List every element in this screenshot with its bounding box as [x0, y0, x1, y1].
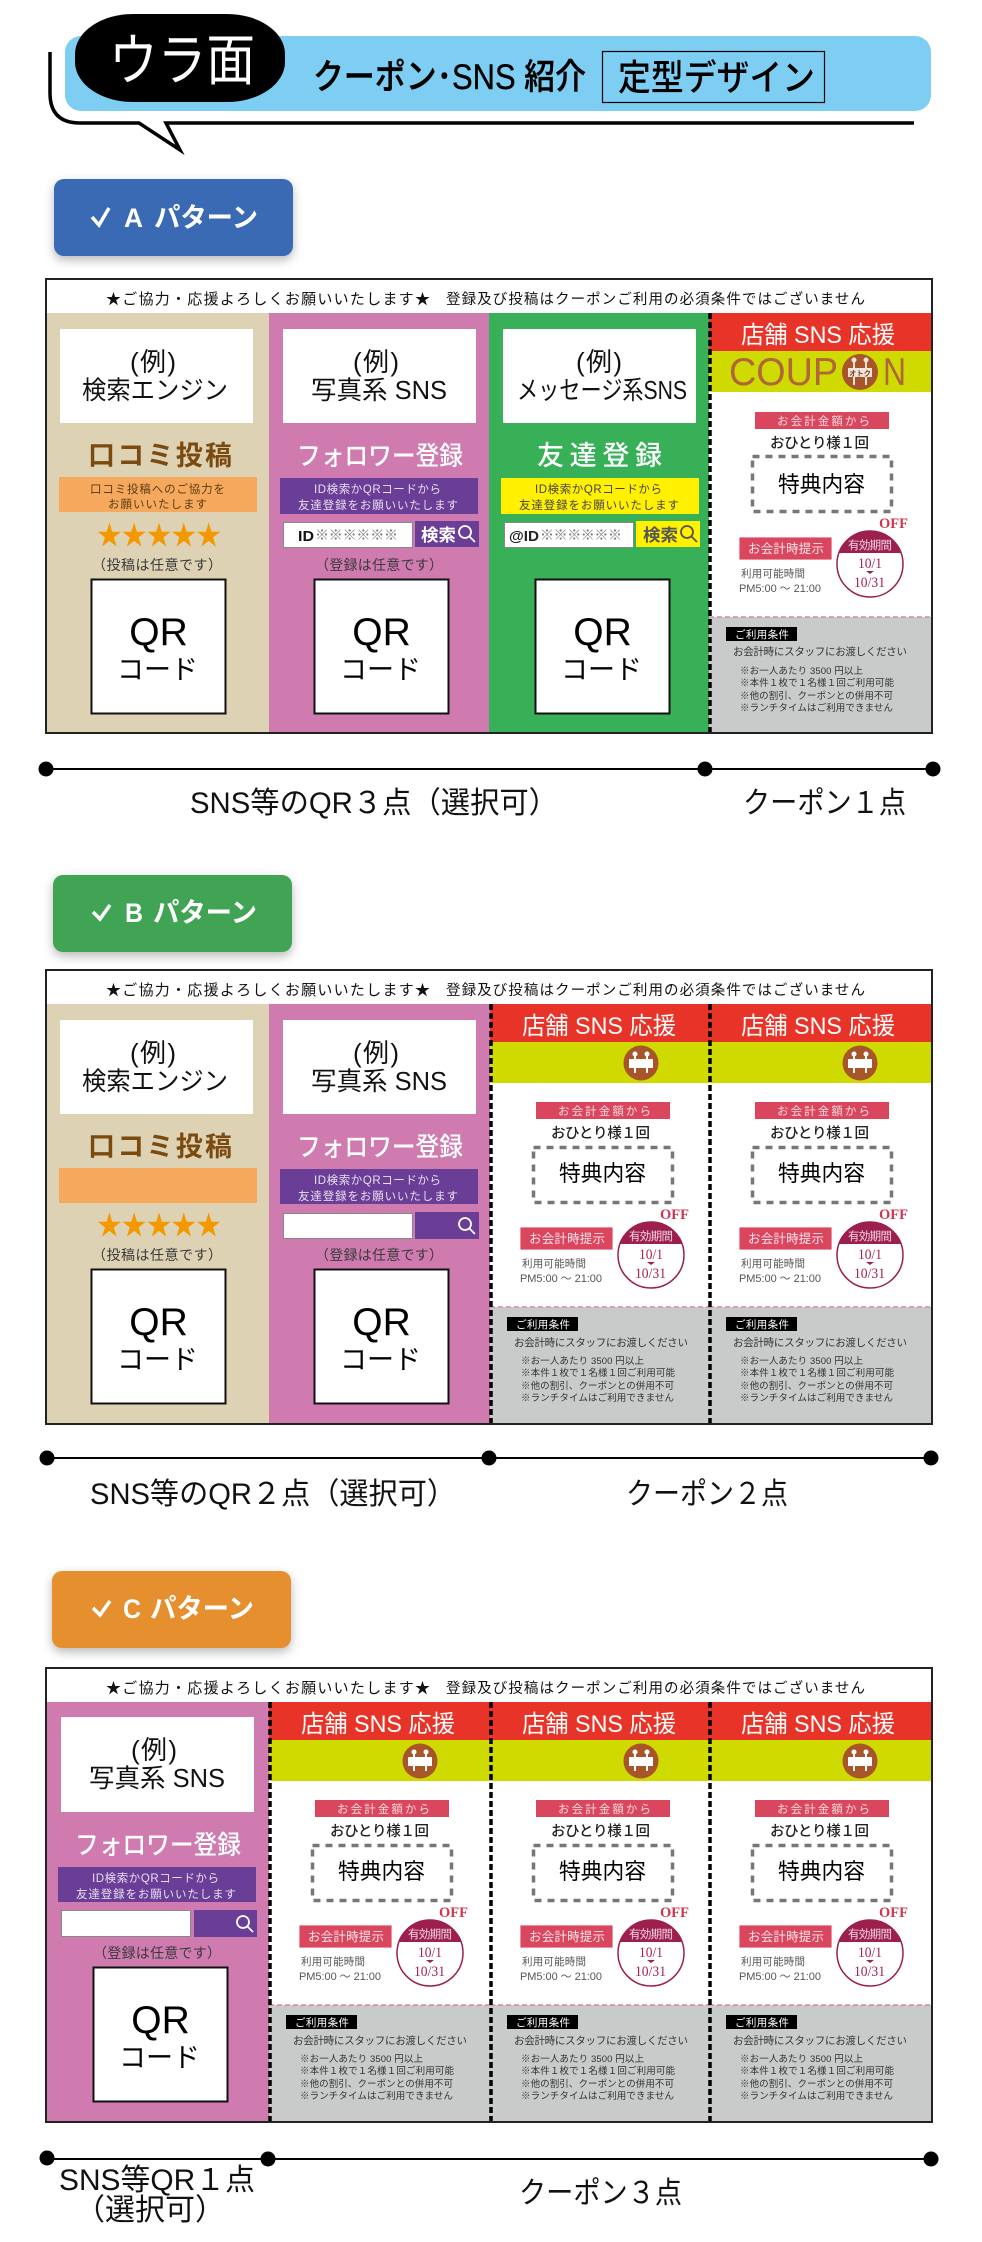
coupon C3: おひとり様１回 [770, 1823, 869, 1840]
coupon A: お会計時提示 [748, 541, 824, 556]
coupon B2: ※ランチタイムはご利用できません [740, 1392, 893, 1404]
header banner [50, 14, 931, 150]
coupon B2: ※お一人あたり 3500 円以上 [740, 1356, 863, 1367]
coupon A: 店舗 SNS 応援 [741, 322, 895, 349]
notice strip text [106, 1679, 865, 1697]
column: photo SNS follower: フォロワー登録 [297, 441, 463, 471]
coupon C2: OFF [660, 1905, 689, 1921]
column: messenger SNS friends: (例) [576, 347, 622, 377]
coupon C3: ※本件１枚で１名様１回ご利用可能 [740, 2065, 894, 2077]
pattern C button: パターン [150, 1594, 254, 1624]
column: messenger SNS friends: 検索 [643, 526, 678, 545]
coupon C2: ※ランチタイムはご利用できません [521, 2090, 674, 2102]
title text: クーポン･SNS 紹介 [313, 58, 586, 97]
column: messenger SNS friends: QR [573, 611, 632, 654]
coupon C1: OFF [439, 1905, 468, 1921]
coupon C1: ※他の割引、クーポンとの併用不可 [300, 2078, 453, 2090]
boxed label: 定型デザイン: 定型デザイン [618, 57, 815, 98]
coupon A: ※ランチタイムはご利用できません [740, 702, 893, 714]
coupon A: OFF [879, 516, 908, 532]
coupon C2 [490, 1702, 710, 2121]
column: review posting [47, 1004, 269, 1423]
column: review posting: QR [129, 611, 188, 654]
column: messenger SNS friends [489, 313, 710, 732]
coupon A [709, 313, 931, 732]
coupon B2: おひとり様１回 [770, 1125, 869, 1142]
coupon C1: 10/31 [414, 1964, 445, 1980]
coupon A: PM5:00 ～ 21:00 [739, 583, 821, 595]
column: photo SNS follower: QR [352, 611, 411, 654]
coupon B1: PM5:00 ～ 21:00 [520, 1273, 602, 1285]
coupon C1: ※本件１枚で１名様１回ご利用可能 [300, 2065, 454, 2077]
span bracket B: SNS等のQR２点（選択可） [90, 1478, 456, 1511]
coupon A: ※他の割引、クーポンとの併用不可 [740, 690, 893, 702]
coupon C1: ※お一人あたり 3500 円以上 [300, 2054, 423, 2065]
coupon C3: OFF [879, 1905, 908, 1921]
coupon C3: お会計金額から [777, 1802, 870, 1816]
column: review posting: (例) [130, 347, 176, 377]
coupon B2: ※本件１枚で１名様１回ご利用可能 [740, 1367, 894, 1379]
coupon C2: ※他の割引、クーポンとの併用不可 [521, 2078, 674, 2090]
column: messenger SNS friends: コード [561, 655, 642, 685]
coupon B1: お会計時にスタッフにお渡しください [514, 1336, 688, 1349]
column: photo SNS follower [269, 1004, 491, 1423]
column: photo SNS follower: コード [340, 1345, 421, 1375]
coupon C2: ※お一人あたり 3500 円以上 [521, 2054, 644, 2065]
coupon B1: 店舗 SNS 応援 [522, 1013, 676, 1040]
coupon B1: 10/1 [639, 1247, 663, 1263]
coupon B2: 10/31 [854, 1266, 885, 1282]
column: review posting: ★★★★★ [97, 521, 221, 551]
coupon A: 利用可能時間 [741, 567, 805, 580]
perforation line [708, 313, 712, 736]
coupon C1: 利用可能時間 [301, 1955, 365, 1968]
coupon C1: ※ランチタイムはご利用できません [300, 2090, 453, 2102]
column: photo SNS follower [47, 1702, 270, 2121]
column: photo SNS follower: コード [119, 2043, 200, 2073]
column: review posting: （投稿は任意です） [92, 557, 222, 573]
notice strip text: 登録及び投稿はクーポンご利用の必須条件ではございません [446, 290, 865, 308]
coupon C3: 10/1 [858, 1945, 882, 1961]
coupon C3: 特典内容 [778, 1859, 865, 1884]
coupon C1: 10/1 [418, 1945, 442, 1961]
coupon C2: 特典内容 [559, 1859, 646, 1884]
column: photo SNS follower: ID検索かQRコードから [314, 482, 441, 496]
coupon C3: 利用可能時間 [741, 1955, 805, 1968]
coupon C2: お会計時提示 [529, 1929, 605, 1944]
coupon B1: 有効期間 [629, 1229, 673, 1243]
notice strip text: ★ご協力・応援よろしくお願いいたします★ [106, 982, 430, 999]
coupon B2: お会計金額から [777, 1104, 870, 1118]
column: photo SNS follower: ID検索かQRコードから [314, 1173, 441, 1187]
column: photo SNS follower [269, 313, 490, 732]
notice strip text: ★ご協力・応援よろしくお願いいたします★ [106, 291, 430, 308]
coupon C3: ※お一人あたり 3500 円以上 [740, 2054, 863, 2065]
coupon A: お会計金額から [777, 414, 870, 428]
coupon C2: おひとり様１回 [551, 1823, 650, 1840]
panel: pattern C layout [46, 1668, 932, 2125]
coupon C2: お会計時にスタッフにお渡しください [514, 2034, 688, 2047]
pattern A button: パターン [154, 203, 258, 233]
coupon B1: お会計時提示 [529, 1231, 605, 1246]
coupon A: ※お一人あたり 3500 円以上 [740, 666, 863, 677]
coupon B2: PM5:00 ～ 21:00 [739, 1273, 821, 1285]
column: review posting: QR [129, 1301, 188, 1344]
coupon B1: 特典内容 [559, 1161, 646, 1186]
column: photo SNS follower: （登録は任意です） [315, 557, 443, 573]
coupon B2: お会計時提示 [748, 1231, 824, 1246]
column: review posting: 口コミ投稿 [88, 1132, 232, 1162]
column: photo SNS follower: コード [340, 655, 421, 685]
coupon B2: 店舗 SNS 応援 [741, 1013, 895, 1040]
pattern A button [54, 179, 293, 256]
coupon C3: ※他の割引、クーポンとの併用不可 [740, 2078, 893, 2090]
coupon B1 [490, 1004, 710, 1423]
column: photo SNS follower: 友達登録をお願いいたします [76, 1887, 236, 1901]
column: photo SNS follower: 友達登録をお願いいたします [298, 1189, 458, 1203]
coupon B1: 10/31 [635, 1266, 666, 1282]
coupon C2: 有効期間 [629, 1927, 673, 1941]
coupon C3: ※ランチタイムはご利用できません [740, 2090, 893, 2102]
coupon C2: 10/31 [635, 1964, 666, 1980]
column: review posting: （投稿は任意です） [92, 1247, 222, 1263]
column: messenger SNS friends: @ID [509, 528, 539, 545]
coupon B1: ご利用条件 [516, 1318, 570, 1331]
coupon C3: 10/31 [854, 1964, 885, 1980]
span bracket A: SNS QR: クーポン１点 [743, 787, 906, 820]
column: photo SNS follower: 検索 [421, 526, 456, 545]
coupon B1: ※他の割引、クーポンとの併用不可 [521, 1380, 674, 1392]
light blue title bar [65, 36, 931, 111]
column: review posting: 口コミ投稿 [88, 441, 232, 471]
coupon C2: ※本件１枚で１名様１回ご利用可能 [521, 2065, 675, 2077]
coupon A: 特典内容 [778, 472, 865, 497]
column: photo SNS follower: 友達登録をお願いいたします [298, 498, 458, 512]
coupon C3: お会計時にスタッフにお渡しください [733, 2034, 907, 2047]
black badge: ウラ面: ウラ面 [109, 29, 255, 92]
coupon C2: ご利用条件 [516, 2016, 570, 2029]
column: review posting: コード [117, 655, 198, 685]
coupon C2: 店舗 SNS 応援 [522, 1711, 676, 1738]
pattern B button: B [125, 898, 143, 928]
coupon C3: 有効期間 [848, 1927, 892, 1941]
column: review posting [47, 313, 269, 732]
coupon C1: お会計時提示 [308, 1929, 384, 1944]
column: messenger SNS friends: メッセージ系SNS [517, 377, 687, 405]
coupon C3: お会計時提示 [748, 1929, 824, 1944]
coupon C3 [709, 1702, 931, 2121]
column: review posting: コード [117, 1345, 198, 1375]
coupon B2 [709, 1004, 931, 1423]
column: messenger SNS friends: ※※※※※※ [540, 527, 622, 543]
pattern B button [53, 875, 292, 952]
coupon B1: お会計金額から [558, 1104, 651, 1118]
coupon C1: 店舗 SNS 応援 [301, 1711, 455, 1738]
coupon A: 10/31 [854, 575, 885, 591]
column: photo SNS follower: ID検索かQRコードから [92, 1871, 219, 1885]
coupon B2: ※他の割引、クーポンとの併用不可 [740, 1380, 893, 1392]
coupon A: おひとり様１回 [770, 435, 869, 452]
coupon B1: ※本件１枚で１名様１回ご利用可能 [521, 1367, 675, 1379]
pattern A button: A [124, 203, 143, 233]
column: review posting: 検索エンジン [82, 377, 228, 405]
span bracket B: クーポン２点 [626, 1478, 788, 1511]
coupon B2: 利用可能時間 [741, 1257, 805, 1270]
column: photo SNS follower: (例) [353, 347, 399, 377]
coupon C2: 10/1 [639, 1945, 663, 1961]
coupon B1: ※お一人あたり 3500 円以上 [521, 1356, 644, 1367]
coupon C1: お会計金額から [337, 1802, 430, 1816]
coupon B2: 有効期間 [848, 1229, 892, 1243]
speech bubble outline [50, 52, 914, 150]
coupon C3: PM5:00 ～ 21:00 [739, 1971, 821, 1983]
coupon B2: お会計時にスタッフにお渡しください [733, 1336, 907, 1349]
column: review posting: ★★★★★ [97, 1211, 221, 1241]
column: photo SNS follower: QR [131, 1999, 190, 2042]
coupon A: ご利用条件 [735, 628, 789, 641]
column: review posting: (例) [130, 1038, 176, 1068]
pattern C button: C [123, 1594, 141, 1624]
column: messenger SNS friends: ID検索かQRコードから [535, 482, 662, 496]
column: photo SNS follower: QR [352, 1301, 411, 1344]
coupon C3: ご利用条件 [735, 2016, 789, 2029]
column: photo SNS follower: 写真系 SNS [311, 377, 447, 405]
coupon B2: OFF [879, 1207, 908, 1223]
span bracket A: SNS QR: SNS等のQR３点（選択可） [190, 787, 558, 820]
notice strip text: 登録及び投稿はクーポンご利用の必須条件ではございません [446, 1679, 865, 1697]
perforation lines [491, 1004, 710, 1427]
column: photo SNS follower: 写真系 SNS [311, 1068, 447, 1096]
column: photo SNS follower: 写真系 SNS [89, 1765, 225, 1793]
span bracket B [40, 1450, 938, 1511]
column: messenger SNS friends: 友達登録をお願いいたします [519, 498, 679, 512]
column: photo SNS follower: （登録は任意です） [315, 1247, 443, 1263]
notice strip text: 登録及び投稿はクーポンご利用の必須条件ではございません [446, 981, 865, 999]
column: photo SNS follower: （登録は任意です） [93, 1945, 221, 1961]
coupon A: COUP [729, 351, 838, 394]
panel: pattern A layout [46, 279, 932, 736]
coupon B2: 特典内容 [778, 1161, 865, 1186]
coupon C1: PM5:00 ～ 21:00 [299, 1971, 381, 1983]
coupon B1: OFF [660, 1207, 689, 1223]
coupon B2: 10/1 [858, 1247, 882, 1263]
column: photo SNS follower: (例) [353, 1038, 399, 1068]
coupon B2: ご利用条件 [735, 1318, 789, 1331]
span bracket C: （選択可） [75, 2194, 225, 2227]
coupon A: 有効期間 [848, 538, 892, 552]
coupon B1: おひとり様１回 [551, 1125, 650, 1142]
pattern C button [52, 1571, 291, 1648]
span bracket A: SNS QR [38, 762, 940, 820]
column: review posting: お願いいたします [108, 498, 207, 511]
coupon A: オトク [849, 368, 871, 378]
coupon C1: お会計時にスタッフにお渡しください [293, 2034, 467, 2047]
coupon A: お会計時にスタッフにお渡しください [733, 645, 907, 658]
coupon A: ※本件１枚で１名様１回ご利用可能 [740, 677, 894, 689]
span bracket C: SNS等QR１点 [59, 2164, 255, 2197]
column: photo SNS follower: フォロワー登録 [297, 1132, 463, 1162]
perforation lines [270, 1702, 710, 2125]
black badge: ウラ面 [75, 14, 285, 102]
coupon A: N [883, 351, 906, 394]
span bracket C [40, 2150, 938, 2227]
span bracket C: クーポン３点 [519, 2177, 682, 2210]
column: review posting: 口コミ投稿へのご協力を [90, 482, 225, 496]
column: review posting: 検索エンジン [82, 1068, 228, 1096]
column: photo SNS follower: (例) [131, 1735, 177, 1765]
pattern B button: パターン [153, 898, 257, 928]
panel: pattern B layout [46, 970, 932, 1427]
coupon C2: 利用可能時間 [522, 1955, 586, 1968]
coupon C1: おひとり様１回 [330, 1823, 429, 1840]
coupon C2: お会計金額から [558, 1802, 651, 1816]
column: photo SNS follower: フォロワー登録 [75, 1830, 241, 1860]
column: photo SNS follower: ID [298, 528, 314, 545]
column: messenger SNS friends: 友達登録 [537, 441, 662, 471]
coupon C1: ご利用条件 [295, 2016, 349, 2029]
coupon C2: PM5:00 ～ 21:00 [520, 1971, 602, 1983]
coupon C1 [269, 1702, 491, 2121]
coupon B1: ※ランチタイムはご利用できません [521, 1392, 674, 1404]
notice strip text: ★ご協力・応援よろしくお願いいたします★ [106, 1680, 430, 1697]
coupon C1: 特典内容 [338, 1859, 425, 1884]
coupon B1: 利用可能時間 [522, 1257, 586, 1270]
coupon C3: 店舗 SNS 応援 [741, 1711, 895, 1738]
notice strip text [106, 981, 865, 999]
coupon C1: 有効期間 [408, 1927, 452, 1941]
notice strip text [106, 290, 865, 308]
column: photo SNS follower: ※※※※※※ [315, 527, 398, 543]
coupon A: 10/1 [858, 556, 882, 572]
